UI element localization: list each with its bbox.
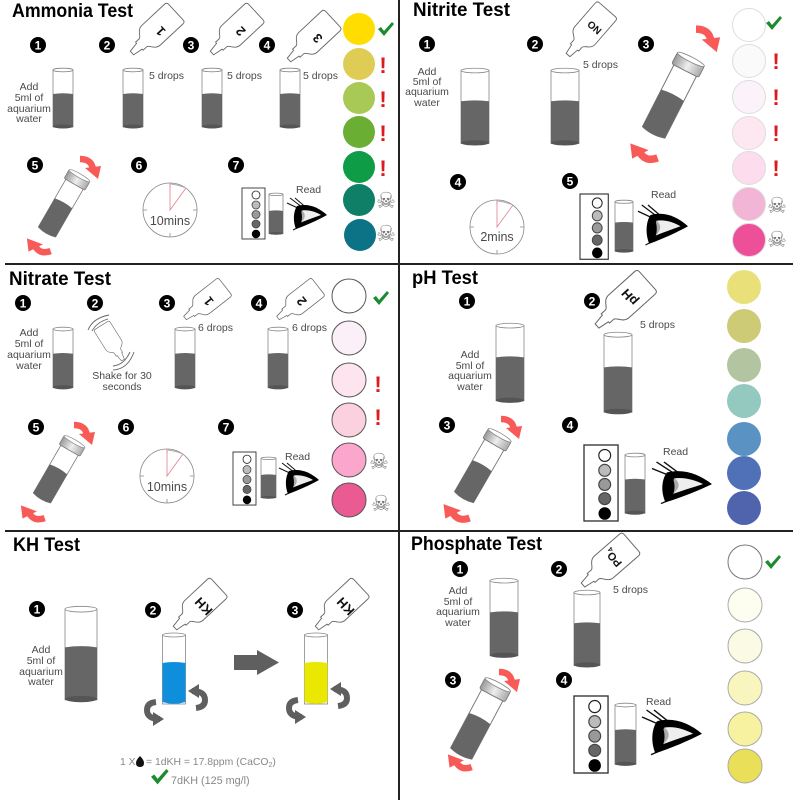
step 2: shake bottle: seconds bbox=[102, 381, 142, 393]
step 1: add water: Add bbox=[418, 66, 436, 78]
step 1: add water: aquarium bbox=[19, 666, 63, 678]
panel: nitrate test bbox=[7, 269, 391, 525]
markers: nitrite: ! bbox=[772, 156, 780, 181]
step 2: blue tube with KH reagent: KH bbox=[192, 594, 216, 618]
step 6: clock 10 minutes bbox=[118, 419, 194, 503]
step 4: reagent 2 bbox=[251, 278, 327, 389]
step 1: add water: water bbox=[15, 113, 42, 125]
step 2: blue tube with KH reagent bbox=[145, 577, 228, 726]
markers: nitrate: ☠ bbox=[371, 492, 391, 517]
step 3: reagent 2 bbox=[183, 2, 265, 128]
step 3: reagent 1: 6 drops bbox=[198, 322, 233, 334]
step 1: add water: water bbox=[27, 676, 54, 688]
step 1: add water bbox=[7, 295, 73, 389]
step 2: shake bottle bbox=[87, 295, 152, 393]
step 4: reagent 2: 2 bbox=[293, 294, 310, 309]
marker: phosphate ok bbox=[765, 555, 781, 569]
step 1: add water: 5ml of bbox=[413, 76, 441, 88]
step 1: add water: Add bbox=[20, 327, 38, 339]
step 3: yellow tube with KH reagent: 3 bbox=[292, 604, 299, 618]
colour swatches: nitrite bbox=[732, 8, 766, 256]
panel: phosphate test bbox=[411, 532, 781, 783]
step 3: shake tube: 3 bbox=[444, 418, 451, 432]
step 2: pH reagent: pH bbox=[618, 286, 641, 309]
step 1: add water bbox=[7, 37, 73, 128]
step 1: add water: water bbox=[413, 97, 440, 109]
markers: nitrate: ☠ bbox=[369, 450, 389, 475]
step 1: add water: Add bbox=[20, 81, 38, 93]
step 5: shake tube: 5 bbox=[32, 158, 39, 172]
step 2: reagent 1: 2 bbox=[104, 38, 111, 52]
title: nitrite: Nitrite Test bbox=[413, 0, 511, 21]
step 6: clock 10 minutes bbox=[131, 157, 197, 237]
step 2: pH reagent: 2 bbox=[589, 294, 596, 308]
markers: ammonia: ! bbox=[379, 87, 387, 112]
step 2: PO4 reagent: 4 bbox=[607, 545, 615, 553]
step 3: shake tube bbox=[439, 417, 522, 526]
step 2: NO reagent: 5 drops bbox=[583, 59, 618, 71]
step 1: add water: 5ml of bbox=[456, 360, 484, 372]
step 3: yellow tube with KH reagent bbox=[287, 577, 370, 724]
formula note bbox=[120, 756, 276, 769]
step 4: read colour: 4 bbox=[561, 674, 568, 688]
step 2: shake bottle: Shake for 30 bbox=[92, 370, 152, 382]
step 1: add water: 1 bbox=[464, 294, 471, 308]
step 3: reagent 1: 3 bbox=[164, 296, 171, 310]
step 1: add water: 1 bbox=[35, 38, 42, 52]
step 1: add water bbox=[448, 293, 524, 403]
markers: nitrate: ! bbox=[374, 405, 382, 430]
markers: nitrite: ☠ bbox=[767, 194, 787, 219]
step 4: reagent 3 bbox=[259, 9, 342, 128]
formula note: 1 X bbox=[120, 757, 136, 768]
step 3: shake tube bbox=[627, 29, 720, 166]
markers: nitrite: ! bbox=[772, 85, 780, 110]
colour swatches: ammonia bbox=[343, 13, 376, 251]
step 2: NO reagent: 2 bbox=[532, 38, 539, 52]
step 1: add water: aquarium bbox=[7, 349, 51, 361]
markers: ammonia: ☠ bbox=[376, 189, 396, 214]
step 3: shake tube: 3 bbox=[450, 674, 457, 688]
step 1: add water: 1 bbox=[34, 602, 41, 616]
step 2: PO4 reagent: 5 drops bbox=[613, 584, 648, 596]
step 2: blue tube with KH reagent: 2 bbox=[150, 604, 157, 618]
step 1: add water: Add bbox=[449, 585, 467, 597]
step 3: reagent 1: 1 bbox=[200, 294, 217, 309]
step 4: clock 2 minutes bbox=[450, 174, 524, 254]
step 5: shake tube bbox=[18, 419, 95, 525]
step 4: read colour: Read bbox=[663, 446, 688, 458]
markers: nitrite: ☠ bbox=[767, 228, 787, 253]
step 4: clock 2 minutes: 4 bbox=[455, 176, 462, 190]
step 4: reagent 2: 4 bbox=[256, 296, 263, 310]
markers: ammonia: ! bbox=[379, 156, 387, 181]
step 1: add water: Add bbox=[32, 644, 50, 656]
step 4: read colour bbox=[556, 672, 702, 773]
step 2: PO4 reagent: 2 bbox=[556, 562, 563, 576]
step 6: clock 10 minutes: 6 bbox=[136, 158, 143, 172]
step 2: reagent 1: 5 drops bbox=[149, 70, 184, 82]
step 6: clock 10 minutes: 10mins bbox=[147, 480, 187, 494]
step 3: reagent 2: 5 drops bbox=[227, 70, 262, 82]
step 5: read colour: Read bbox=[651, 189, 676, 201]
step 2: reagent 1: 1 bbox=[153, 24, 169, 39]
colour swatches: pH bbox=[727, 270, 761, 525]
step 4: read colour bbox=[562, 417, 712, 521]
step 7: read colour: 7 bbox=[223, 420, 230, 434]
formula note: = 1dKH = 17.8ppm (CaCO bbox=[146, 757, 268, 768]
panel: KH test bbox=[13, 535, 370, 787]
step 6: clock 10 minutes: 10mins bbox=[150, 214, 190, 228]
step 2: NO reagent: NO bbox=[586, 18, 604, 36]
step 4: read colour: Read bbox=[646, 696, 671, 708]
panel: ammonia test bbox=[7, 1, 396, 258]
step 4: reagent 3: 4 bbox=[264, 38, 271, 52]
step 5: shake tube bbox=[24, 157, 101, 258]
step 4: reagent 3: 5 drops bbox=[303, 70, 338, 82]
title: phosphate: Phosphate Test bbox=[411, 534, 543, 555]
result: 7dKH: 7dKH (125 mg/l) bbox=[171, 775, 250, 787]
step 1: add water: Add bbox=[461, 349, 479, 361]
markers: ammonia: ! bbox=[379, 53, 387, 78]
step 1: add water: 5ml of bbox=[444, 596, 472, 608]
step 3: shake tube bbox=[445, 672, 520, 774]
step 1: add water: water bbox=[444, 617, 471, 629]
title: ammonia: Ammonia Test bbox=[12, 1, 134, 22]
title: KH: KH Test bbox=[13, 535, 81, 556]
step 7: read colour bbox=[218, 419, 319, 505]
step 3: reagent 2: 3 bbox=[188, 38, 195, 52]
step 2: pH reagent: 5 drops bbox=[640, 319, 675, 331]
step 3: yellow tube with KH reagent: KH bbox=[334, 594, 358, 618]
step 5: read colour: 5 bbox=[567, 174, 574, 188]
markers: ammonia bbox=[376, 22, 396, 247]
step 1: add water: 1 bbox=[424, 38, 431, 52]
step 4: reagent 2: 6 drops bbox=[292, 322, 327, 334]
step 1: add water bbox=[436, 561, 518, 658]
step 1: add water: aquarium bbox=[7, 103, 51, 115]
step 1: add water: water bbox=[456, 381, 483, 393]
markers: nitrite: ! bbox=[772, 49, 780, 74]
step 2: PO4 reagent: PO bbox=[605, 549, 625, 569]
step 7: read colour: Read bbox=[285, 451, 310, 463]
markers: nitrite bbox=[766, 16, 787, 253]
markers: nitrite: ! bbox=[772, 121, 780, 146]
markers: nitrate bbox=[369, 291, 391, 517]
step 1: add water: 5ml of bbox=[15, 338, 43, 350]
step 2: reagent 1 bbox=[99, 2, 185, 128]
step 1: add water: aquarium bbox=[448, 370, 492, 382]
title: nitrate: Nitrate Test bbox=[9, 269, 112, 290]
colour swatches: phosphate bbox=[728, 545, 762, 783]
formula note: ) bbox=[272, 757, 276, 768]
big arrow bbox=[234, 650, 279, 675]
markers: ammonia: ☠ bbox=[376, 222, 396, 247]
step 2: PO4 reagent bbox=[551, 532, 648, 667]
step 6: clock 10 minutes: 6 bbox=[123, 420, 130, 434]
step 1: add water: aquarium bbox=[405, 86, 449, 98]
step 1: add water: 1 bbox=[20, 296, 27, 310]
step 2: NO reagent bbox=[527, 1, 618, 145]
result: 7dKH bbox=[151, 769, 250, 787]
step 4: reagent 3: 3 bbox=[310, 31, 326, 46]
step 2: pH reagent bbox=[584, 269, 675, 414]
step 5: read colour bbox=[562, 173, 688, 259]
colour swatches: nitrate bbox=[332, 279, 366, 517]
step 1: add water: aquarium bbox=[436, 606, 480, 618]
title: pH: pH Test bbox=[412, 268, 479, 289]
step 3: shake tube: 3 bbox=[643, 38, 650, 52]
markers: ammonia: ! bbox=[379, 121, 387, 146]
step 7: read colour bbox=[228, 157, 327, 239]
step 3: reagent 1 bbox=[159, 278, 233, 389]
step 7: read colour: Read bbox=[296, 184, 321, 196]
step 1: add water: 5ml of bbox=[15, 92, 43, 104]
panel: pH test bbox=[412, 268, 761, 526]
step 1: add water: water bbox=[15, 360, 42, 372]
step 1: add water bbox=[405, 36, 489, 145]
step 1: add water: 5ml of bbox=[27, 655, 55, 667]
markers: nitrate: ! bbox=[374, 372, 382, 397]
step 4: read colour: 4 bbox=[567, 418, 574, 432]
step 1: add water: 1 bbox=[457, 562, 464, 576]
panel: nitrite test bbox=[405, 0, 787, 259]
step 3: reagent 2: 2 bbox=[233, 24, 249, 39]
formula note: 2 bbox=[268, 762, 272, 769]
step 1: add water bbox=[19, 601, 97, 702]
step 5: shake tube: 5 bbox=[33, 420, 40, 434]
step 4: clock 2 minutes: 2mins bbox=[480, 230, 514, 244]
step 2: shake bottle: 2 bbox=[92, 296, 99, 310]
step 7: read colour: 7 bbox=[233, 158, 240, 172]
